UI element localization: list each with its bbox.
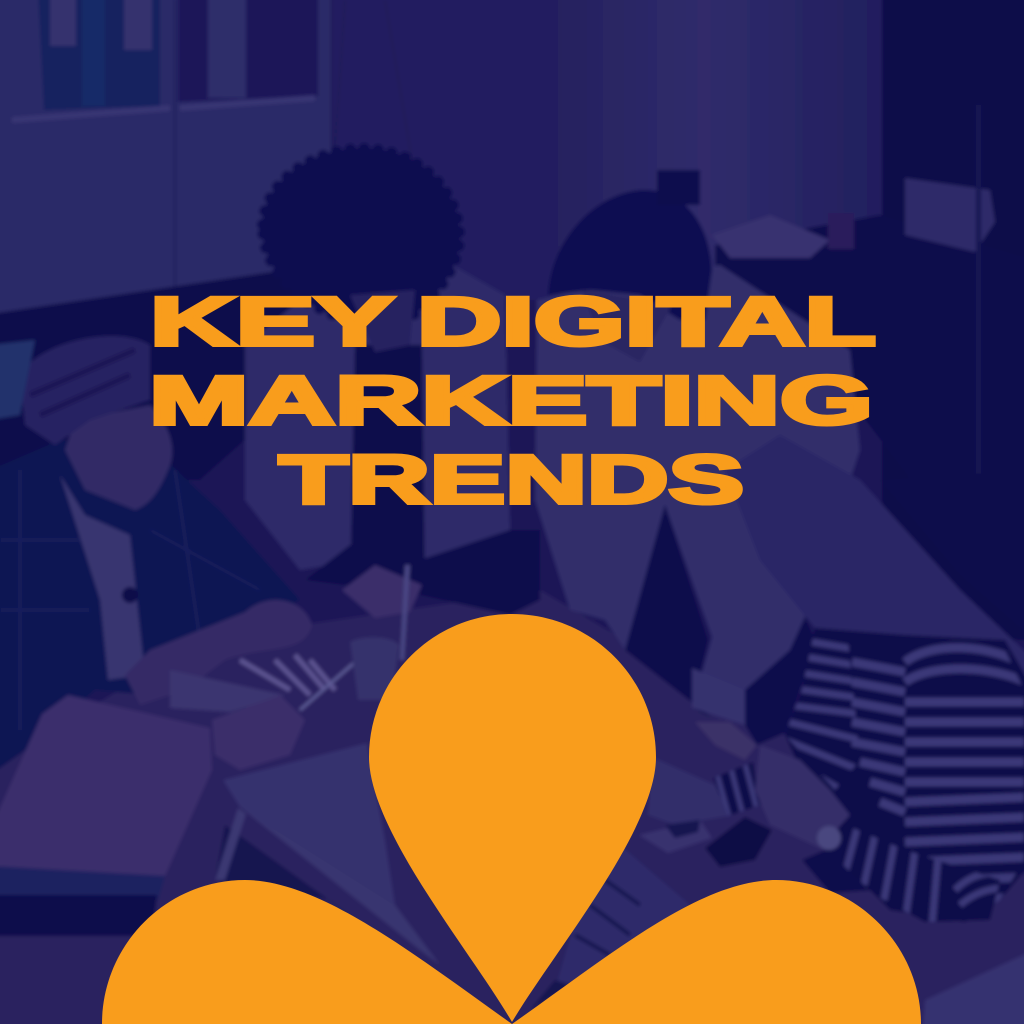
dark right person side — [880, 470, 1024, 640]
table paper — [223, 743, 395, 905]
right person hair — [548, 190, 712, 320]
right person cuff — [692, 668, 745, 725]
left woman arm — [125, 600, 312, 705]
sweater base — [785, 628, 1024, 922]
sweater upper arm stripes — [780, 640, 860, 795]
left woman shirt — [60, 475, 145, 680]
dark right corner — [882, 0, 1024, 640]
center person shirt dark — [350, 345, 425, 590]
center hand — [342, 565, 422, 618]
blonde hair — [725, 435, 1024, 690]
box — [0, 695, 212, 876]
under cabinet — [0, 250, 333, 480]
forearm — [648, 757, 728, 825]
wall — [556, 0, 886, 300]
center person hair — [262, 148, 460, 318]
laptop keyboard — [555, 845, 690, 990]
mug — [657, 170, 700, 205]
left woman jacket — [0, 440, 300, 775]
dark under sleeve — [745, 617, 815, 745]
title — [149, 283, 876, 518]
title: DIGITAL — [417, 283, 876, 360]
title: TRENDS — [279, 441, 744, 518]
title: KEY — [150, 283, 394, 360]
table — [0, 590, 1024, 1024]
right person jacket — [535, 265, 860, 725]
petal: top — [369, 614, 656, 1022]
markers — [240, 655, 335, 695]
glass — [350, 637, 399, 700]
left woman face — [65, 405, 172, 510]
dark patch under arm — [802, 835, 875, 893]
petal: right — [512, 880, 921, 1024]
watch — [817, 826, 841, 850]
notebook and right hand — [170, 670, 285, 712]
center person jacket — [245, 258, 510, 570]
hand and wrist — [755, 745, 850, 848]
title: MARKETING — [149, 362, 873, 439]
lower left table — [0, 936, 155, 1024]
petal: left — [102, 880, 512, 1024]
cards on table — [639, 820, 712, 853]
left woman headscarf — [20, 336, 150, 445]
tall white column — [333, 0, 558, 300]
laptop lid — [215, 825, 405, 955]
center person face — [350, 290, 415, 352]
sweater lower arm — [840, 826, 1000, 922]
cabinet — [0, 0, 331, 314]
table back right — [715, 215, 1024, 640]
cabinet shelf — [38, 0, 160, 110]
mouse — [705, 817, 772, 867]
sweater torso stripes — [852, 648, 1024, 902]
right person inner dark — [625, 505, 712, 718]
striped cuff — [713, 762, 760, 816]
paper bottom right — [922, 950, 1024, 1024]
